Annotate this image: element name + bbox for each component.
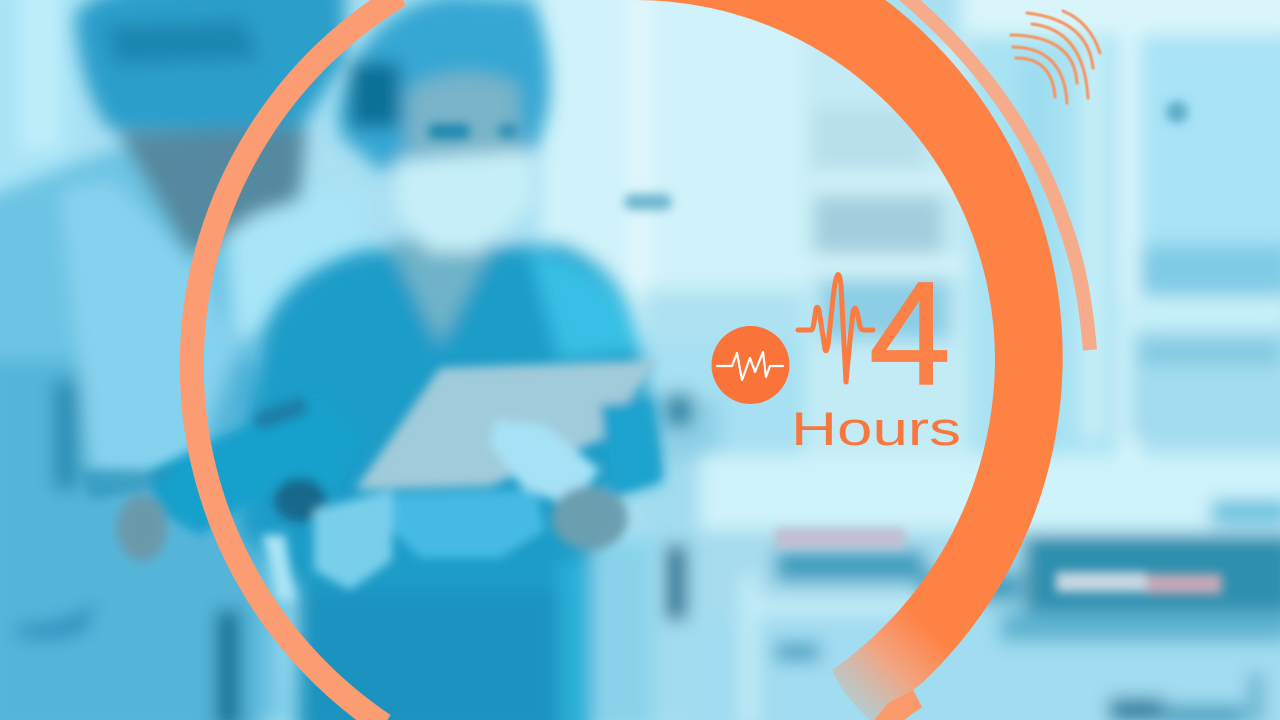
thin light outer arc segment, upper right bbox=[904, 0, 1090, 350]
thick orange progress arc, right side bbox=[635, 0, 1063, 720]
icon: concentric signal waves bbox=[1011, 11, 1100, 103]
icon: large heartbeat line bbox=[798, 275, 873, 382]
tablet, gloves and pockets bbox=[80, 360, 662, 600]
label: Hours: Hours bbox=[791, 402, 961, 455]
left doctor figure bbox=[0, 0, 370, 720]
thin outer progress ring, left side bbox=[192, 0, 400, 720]
background: small dark fittings bbox=[624, 101, 1222, 594]
icon: round orange pulse badge bbox=[712, 326, 790, 404]
nurse figure bbox=[240, 0, 660, 720]
big number 4: 4 bbox=[869, 252, 951, 416]
white pulse line bbox=[717, 352, 783, 380]
orange tip at base of arc bbox=[873, 690, 922, 720]
